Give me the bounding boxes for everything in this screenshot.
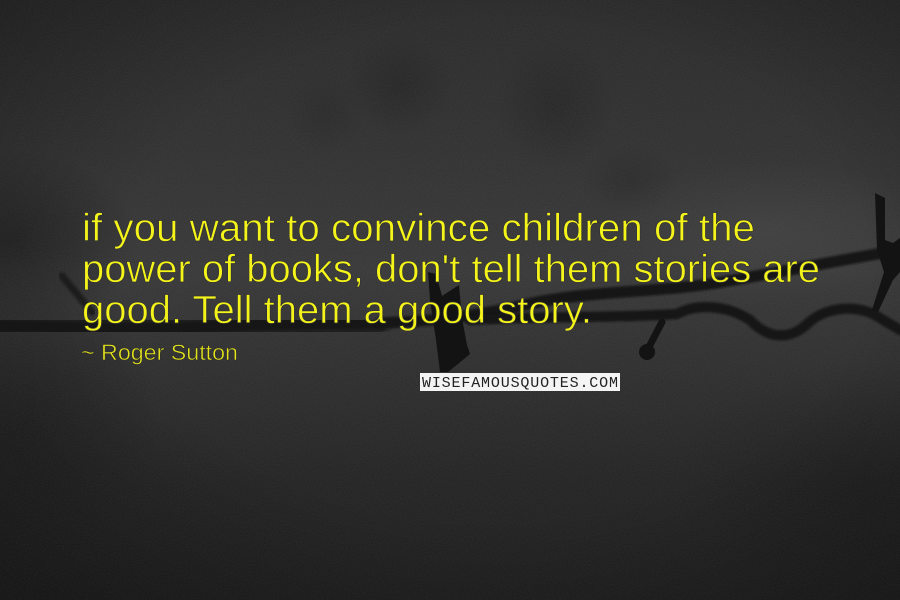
- right barb: [872, 193, 900, 312]
- wire drip barb: [639, 322, 662, 360]
- quote text: power of books, don't tell them stories are: [82, 248, 820, 291]
- lower wire strand: [470, 307, 900, 335]
- left barb: [62, 276, 92, 312]
- watermark badge: WISEFAMOUSQUOTES.COM: [422, 375, 618, 392]
- quote text: good. Tell them a good story.: [82, 289, 592, 332]
- barbed wire: [0, 193, 900, 372]
- centre barb: [428, 272, 470, 372]
- left wire thick section: [0, 323, 380, 329]
- upper wire strand: [380, 250, 900, 323]
- quote text: if you want to convince children of the: [82, 207, 755, 250]
- quote text: [82, 207, 820, 332]
- author attribution: ~ Roger Sutton: [81, 340, 238, 365]
